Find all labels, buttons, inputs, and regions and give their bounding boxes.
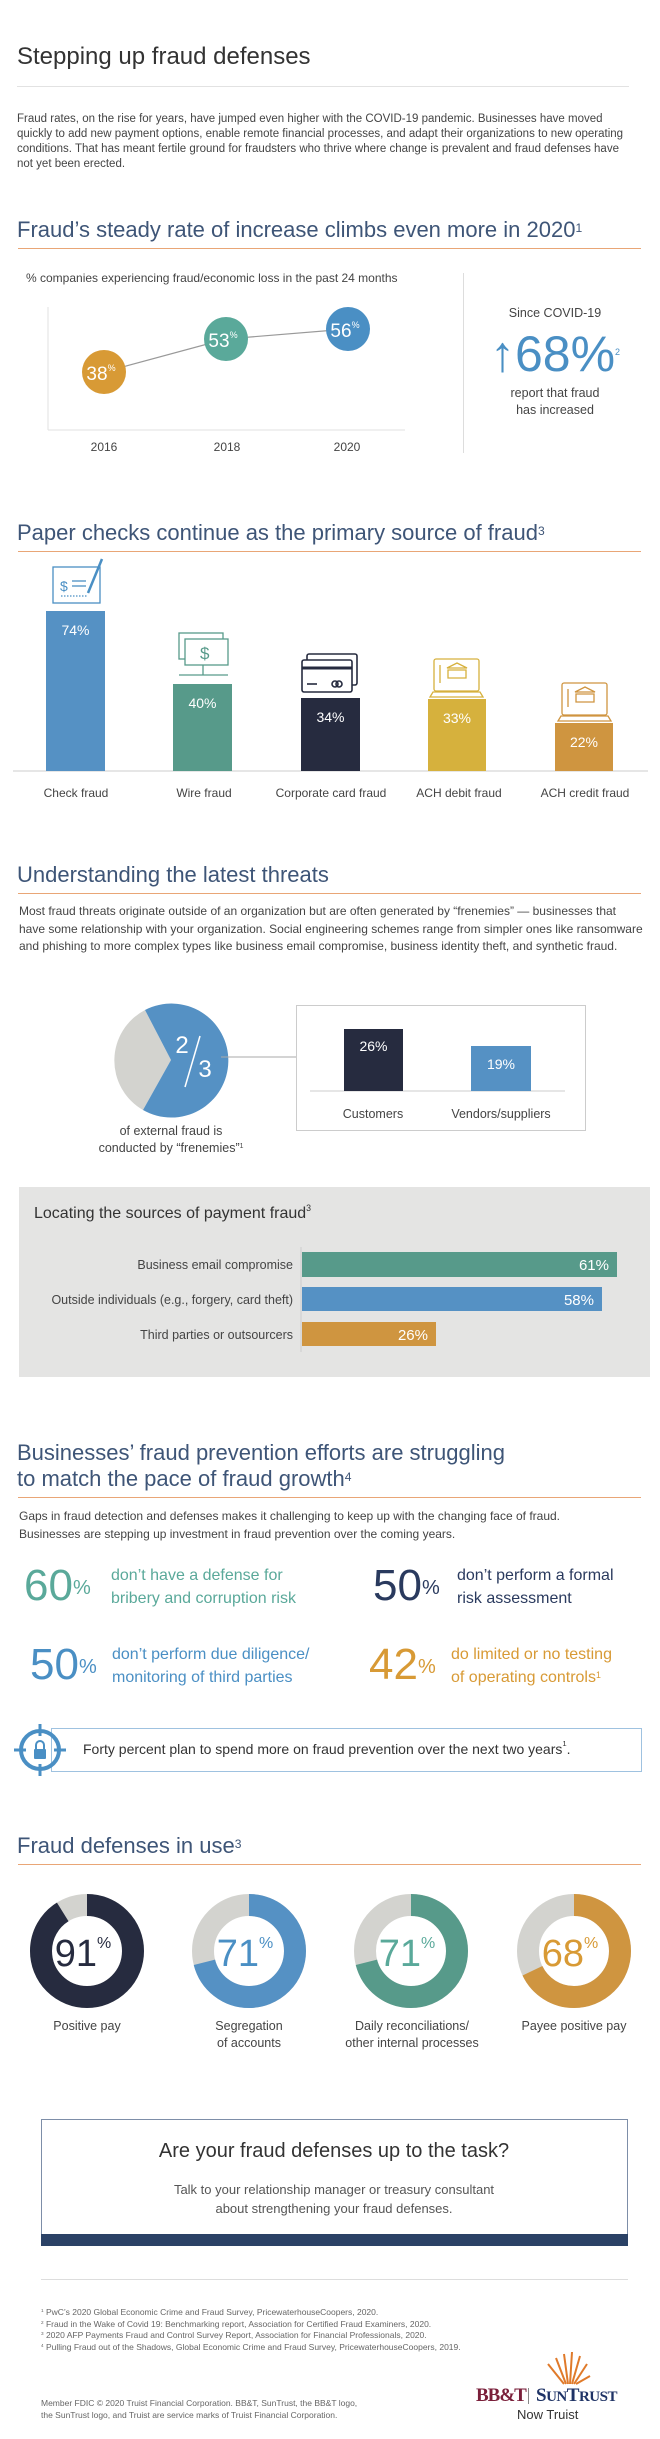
bar: wire: 40% (188, 695, 217, 711)
callout: 68% (490, 306, 620, 417)
icon: ach debit (430, 659, 483, 697)
bar chart: fraud types: Check fraud (44, 786, 108, 800)
bar: ach credit (555, 723, 613, 771)
threats paragraph: Most fraud threats originate outside of an organization but are often generated by “frenemies” — businesses that have some relationship with your organization. Social engineering schemes range from simpler ones like ransomware and phishing to more complex types like business email compromise, business identity theft, and synthetic fraud. (19, 904, 643, 953)
logo: BB&T SunTrust (476, 2352, 618, 2422)
text: don’t perform a formal (457, 1567, 614, 1584)
bar chart: fraud types: ACH debit fraud (416, 786, 502, 800)
bar: customers: 26% (359, 1038, 388, 1054)
prevention paragraph: Gaps in fraud detection and defenses makes it challenging to keep up with the changing face of fraud. (19, 1509, 560, 1523)
stat: 50% blue (30, 1640, 310, 1689)
intro paragraph: Fraud rates, on the rise for years, have jumped even higher with the COVID-19 pandemic. Businesses have moved quickly to add new payment options, enable remote financial processes, and adapt their organizations to new operating conditions. That has meant fertile ground for fraudsters who thrive where change is prevalent and fraud defenses have not yet been erected. (17, 113, 623, 170)
donut: payee positive pay (528, 1905, 620, 1997)
stat: 60% (24, 1561, 296, 1610)
point 2020: 56 (330, 321, 352, 342)
CTA box: Are your fraud defenses up to the task? (159, 2140, 509, 2162)
callout: spending: Forty percent plan to spend more on fraud prevention over the next two years1. (83, 1739, 571, 1757)
CTA box: about strengthening your fraud defenses. (215, 2201, 453, 2216)
donut: positive pay: % (97, 1935, 111, 1952)
legal text: Member FDIC © 2020 Truist Financial Corporation. BB&T, SunTrust, the BB&T logo, (41, 2398, 357, 2408)
logo: BB&T SunTrust: BB&T (476, 2385, 526, 2406)
prevention paragraph: Businesses are stepping up investment in fraud prevention over the coming years. (19, 1526, 455, 1540)
donut: segregation: % (259, 1935, 273, 1952)
footnotes: 3 2020 AFP Payments Fraud and Control Survey Report, Association for Financial Professionals, 2020. (41, 2330, 427, 2340)
bar chart: fraud types: ACH credit fraud (541, 786, 629, 800)
logo: BB&T SunTrust: SUNTRUST (536, 2385, 617, 2406)
line chart: 2020 (334, 440, 361, 454)
bar chart: fraud types: Wire fraud (176, 786, 232, 800)
icon: wire (179, 633, 228, 675)
footnotes: 2 Fraud in the Wake of Covid 19: Benchmarking report, Association for Certified Fraud Examiners, 2020. (41, 2319, 431, 2329)
bar chart: fraud types: Corporate card fraud (276, 786, 386, 800)
heading: prevention efforts (17, 1440, 505, 1491)
stat: 50% navy (373, 1561, 614, 1610)
prevention paragraph (19, 1509, 560, 1540)
pie caption: of external fraud is (120, 1124, 222, 1138)
donut: reconciliations: 71 (379, 1933, 421, 1975)
stat: 42%: 42% (369, 1640, 436, 1689)
point 2020: % (352, 320, 360, 330)
stat: 50% navy: 50% (373, 1561, 440, 1610)
bar: ach credit: 22% (570, 734, 598, 750)
donut: payee positive pay: 68 (542, 1933, 584, 1975)
line chart (48, 307, 405, 454)
horizontal bar chart (51, 1247, 617, 1352)
legal text (41, 2398, 357, 2420)
heading: threats: Understanding the latest threats (17, 862, 329, 887)
icon: check: $ (60, 578, 68, 594)
logo: BB&T SunTrust: Now Truist (517, 2407, 578, 2422)
heading: defenses in use: Fraud defenses in use3 (17, 1833, 241, 1858)
pie chart: 2/3: 3 (198, 1056, 212, 1083)
bar: BEC (302, 1252, 617, 1277)
point 2018: 53 (208, 331, 230, 352)
panel: payment fraud sources (19, 1187, 650, 1377)
footnotes: 4 Pulling Fraud out of the Shadows, Global Economic Crime and Fraud Survey, PricewaterhouseCoopers, 2019. (41, 2342, 461, 2352)
pie chart: 2/3: 2 (175, 1032, 189, 1059)
bar: vendors (471, 1046, 531, 1091)
callout: 68%: report that fraud (511, 386, 599, 400)
callout: spending (14, 1724, 642, 1776)
pie caption: conducted by “frenemies”1 (99, 1141, 243, 1155)
line chart: 2018 (214, 440, 241, 454)
donut charts: Segregation (215, 2019, 283, 2033)
horizontal bar chart: Outside individuals (e.g., forgery, card theft) (51, 1293, 293, 1307)
icon: wire: $ (200, 644, 210, 663)
bar: customers (344, 1029, 403, 1091)
donut: positive pay: 91 (55, 1933, 97, 1975)
point 2018 (204, 317, 248, 361)
legal text: the SunTrust logo, and Truist are service marks of Truist Financial Corporation. (41, 2410, 337, 2420)
donut charts: Payee positive pay (522, 2019, 627, 2033)
panel: frenemies bar chart: Customers (343, 1107, 403, 1121)
icon: lock target (14, 1724, 66, 1776)
donut: reconciliations (365, 1905, 457, 1997)
line chart: 2016 (91, 440, 118, 454)
point 2016 (82, 350, 126, 394)
bar: third parties: 26% (398, 1327, 428, 1344)
bar: card: 34% (316, 709, 345, 725)
bar: BEC: 61% (579, 1257, 609, 1274)
panel title: Locating the sources of payment fraud3 (34, 1203, 311, 1222)
heading: prevention efforts: to match the pace of fraud growth4 (17, 1466, 351, 1491)
point 2016: 38 (86, 364, 108, 385)
line chart subtitle: % companies experiencing fraud/economic loss in the past 24 months (26, 271, 398, 285)
bar: third parties (302, 1322, 436, 1346)
bar: ach debit (428, 699, 486, 771)
CTA box (41, 2119, 628, 2245)
horizontal bar chart: Business email compromise (137, 1258, 293, 1272)
stat: 42% (369, 1640, 612, 1689)
heading: prevention efforts: Businesses’ fraud prevention efforts are struggling (17, 1440, 505, 1465)
donut charts: Positive pay (53, 2019, 121, 2033)
bar: ach debit: 33% (443, 710, 471, 726)
bar: card (301, 698, 360, 771)
stat: 60%: 60% (24, 1561, 91, 1610)
text: don’t perform due diligence/ (112, 1646, 309, 1663)
bar: check: 74% (61, 622, 90, 638)
text: monitoring of third parties (112, 1669, 293, 1686)
bar: outside individuals (302, 1287, 602, 1311)
callout: 68%: has increased (516, 403, 594, 417)
CTA box: Talk to your relationship manager or treasury consultant (174, 2182, 494, 2197)
callout: 68%: Since COVID-19 (509, 306, 601, 320)
bar chart: fraud types (13, 558, 648, 800)
pie chart: 2/3 (114, 1004, 296, 1118)
title: Stepping up fraud defenses (17, 43, 311, 70)
donut charts: Daily reconciliations/ (355, 2019, 469, 2033)
icon: card (302, 654, 357, 692)
pie caption (99, 1124, 244, 1155)
callout: 68%: ↑68%2 (490, 326, 620, 382)
text: don’t have a defense for (111, 1567, 283, 1584)
donut: reconciliations: % (421, 1935, 435, 1952)
point 2018: % (230, 330, 238, 340)
icon: ach credit (558, 683, 611, 721)
stat: 50% blue: 50% (30, 1640, 97, 1689)
text: of operating controls1 (451, 1669, 601, 1686)
point 2016: % (108, 363, 116, 373)
point 2020 (326, 307, 370, 351)
panel: frenemies bar chart (296, 1005, 586, 1131)
panel: frenemies bar chart: Vendors/suppliers (451, 1107, 551, 1121)
text: do limited or no testing (451, 1646, 612, 1663)
bar: check (46, 611, 105, 771)
bar: outside individuals: 58% (564, 1292, 594, 1309)
donut: payee positive pay: % (584, 1935, 598, 1952)
donut charts (30, 1894, 631, 2050)
horizontal bar chart: Third parties or outsourcers (140, 1328, 293, 1342)
donut: segregation: 71 (217, 1933, 259, 1975)
heading: fraud rate: Fraud’s steady rate of increase climbs even more in 20201 (17, 217, 582, 242)
bar: vendors: 19% (487, 1056, 515, 1072)
donut: segregation (203, 1905, 295, 1997)
footnotes: 1 PwC’s 2020 Global Economic Crime and Fraud Survey, PricewaterhouseCoopers, 2020. (41, 2307, 378, 2317)
donut charts: other internal processes (345, 2036, 479, 2050)
heading: paper checks: Paper checks continue as the primary source of fraud3 (17, 520, 545, 545)
donut: positive pay (41, 1905, 133, 1997)
text: bribery and corruption risk (111, 1590, 296, 1607)
text: risk assessment (457, 1590, 572, 1607)
footnotes (41, 2307, 461, 2352)
icon: check (53, 559, 102, 603)
bar: wire (173, 684, 232, 771)
donut charts: of accounts (217, 2036, 281, 2050)
